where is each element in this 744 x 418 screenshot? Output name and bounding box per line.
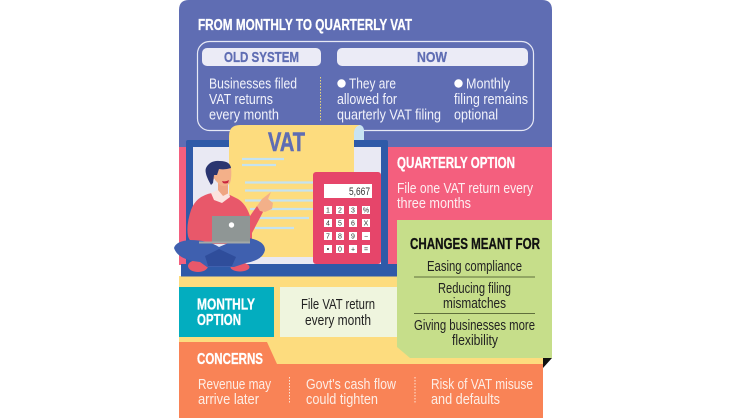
VAT document <box>229 125 360 257</box>
calculator: % <box>363 208 369 214</box>
text: quarterly option description <box>397 180 533 212</box>
heading: changes meant for: CHANGES MEANT FOR <box>410 236 540 253</box>
calculator: • <box>327 246 330 254</box>
monitor base <box>181 264 397 276</box>
feet <box>188 260 208 272</box>
item: giving businesses more flexibility: flexibility <box>452 332 498 349</box>
text: old system description <box>209 76 297 124</box>
calculator: 9 <box>351 234 355 240</box>
icon: person with laptop <box>174 161 273 272</box>
calculator: + <box>351 246 355 254</box>
text: quarterly option description: three months <box>397 195 471 212</box>
calculator: 8 <box>338 234 342 240</box>
text: monthly filing optional: Monthly <box>466 76 510 92</box>
text: monthly filing optional <box>454 76 528 124</box>
text: monthly filing optional: optional <box>454 106 498 124</box>
item: reducing filing mismatches <box>438 280 511 312</box>
calculator: 3 <box>351 208 355 214</box>
item: reducing filing mismatches: mismatches <box>443 295 506 312</box>
concern: cash flow: Govt's cash flow <box>306 376 396 393</box>
text: quarterly filing allowed: quarterly VAT filing <box>337 106 441 124</box>
neck <box>218 183 228 198</box>
panel: monthly option description <box>280 287 402 337</box>
face <box>215 167 231 186</box>
text: quarterly option description: File one VAT return every <box>397 180 533 197</box>
crossed legs <box>174 238 265 267</box>
calculator <box>313 172 381 264</box>
label: old system: OLD SYSTEM <box>224 49 299 66</box>
label: now <box>337 48 528 66</box>
calculator: = <box>364 246 368 254</box>
text: quarterly filing allowed: allowed for <box>337 91 397 108</box>
panel: concerns <box>179 342 543 418</box>
calculator: 0 <box>338 246 342 254</box>
concern: cash flow: could tighten <box>306 391 378 408</box>
torso and arm <box>187 193 263 244</box>
concern: misuse: Risk of VAT misuse <box>431 376 533 393</box>
text: monthly filing optional: filing remains <box>454 91 528 108</box>
text: quarterly filing allowed: They are <box>349 76 396 92</box>
concern: revenue <box>198 376 271 408</box>
item: giving businesses more flexibility: Giving businesses more <box>414 317 535 334</box>
text: old system description: VAT returns <box>209 91 273 108</box>
heading: quarterly option: QUARTERLY OPTION <box>397 155 515 172</box>
panel: monthly option: MONTHLY <box>197 296 256 314</box>
panel: monthly option description: File VAT return <box>301 296 375 313</box>
panel: quarterly option <box>179 147 552 265</box>
hair <box>206 161 231 185</box>
concern: misuse: and defaults <box>431 391 500 408</box>
illustration: screen with VAT document and calculator <box>174 125 397 276</box>
heading: concerns: CONCERNS <box>197 351 263 368</box>
calculator: 6 <box>351 220 355 228</box>
VAT document: VAT <box>268 127 305 157</box>
calculator: 5,667 <box>349 186 370 198</box>
collar <box>211 190 230 203</box>
panel: changes meant for <box>397 220 552 358</box>
screen frame <box>186 140 388 265</box>
item: easing compliance: Easing compliance <box>427 258 522 275</box>
heading: from monthly to quarterly VAT: FROM MONTHLY TO QUARTERLY VAT <box>198 17 412 34</box>
text: quarterly filing allowed <box>337 76 441 124</box>
concern: revenue: Revenue may <box>198 376 271 393</box>
concern: cash flow <box>306 376 396 408</box>
item: giving businesses more flexibility <box>414 317 535 349</box>
calculator: − <box>364 234 368 240</box>
label: now: NOW <box>417 49 448 66</box>
laptop <box>212 216 250 243</box>
mouth <box>222 180 229 184</box>
panel: from monthly to quarterly VAT <box>179 0 552 150</box>
paper curl <box>350 125 364 140</box>
text: old system description: every month <box>209 106 279 124</box>
yellow band <box>179 276 543 366</box>
item: reducing filing mismatches: Reducing filing <box>438 280 511 297</box>
text: old system description: Businesses filed <box>209 76 297 92</box>
pointing hand <box>257 192 273 212</box>
concern: misuse <box>431 376 533 408</box>
panel: monthly option <box>179 287 274 337</box>
calculator: 1 <box>326 208 330 214</box>
panel: monthly option description: every month <box>305 312 371 329</box>
calculator: 4 <box>326 220 330 228</box>
calculator: 7 <box>326 234 330 240</box>
calculator: 5 <box>338 220 342 228</box>
comparison box outline <box>198 42 534 130</box>
ear <box>210 172 216 180</box>
calculator: X <box>364 220 369 228</box>
fold shadow <box>543 358 552 368</box>
concern: revenue: arrive later <box>198 391 259 408</box>
panel: monthly option: OPTION <box>197 312 241 329</box>
calculator: 2 <box>338 208 342 214</box>
